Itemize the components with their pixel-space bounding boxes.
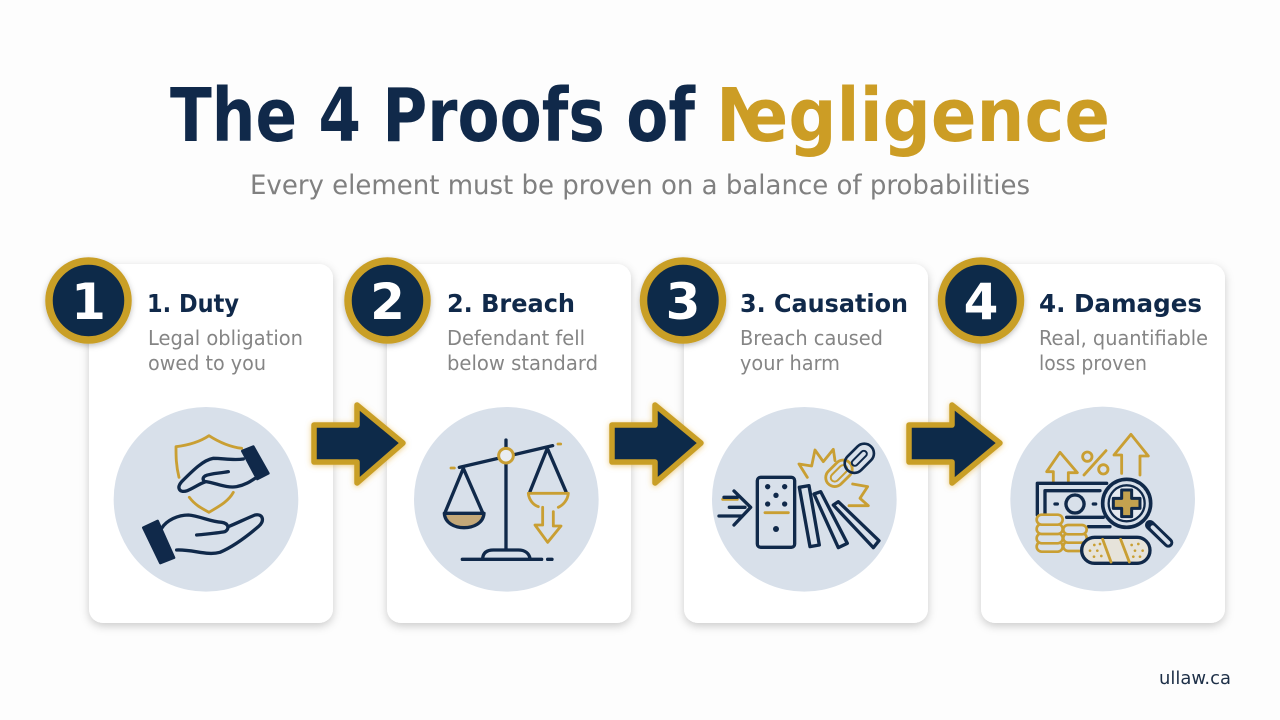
badge: 4: 4	[964, 273, 998, 331]
text: duty description: owed to you	[148, 351, 266, 375]
text: breach description: below standard	[447, 351, 598, 375]
title: The 4 Proofs of	[170, 73, 696, 159]
heading: duty: 1. Duty	[147, 289, 239, 318]
text: damages description	[1039, 326, 1208, 375]
icon: money and bandage	[1010, 407, 1195, 591]
badge: 1	[49, 261, 128, 340]
text: duty description: Legal obligation	[148, 326, 303, 350]
icon: dominoes and chain	[712, 407, 897, 592]
panel: duty	[89, 264, 333, 623]
badge: 2: 2	[370, 273, 405, 331]
badge: 3	[644, 261, 722, 340]
badge: 3: 3	[666, 273, 700, 331]
arrow: breach to causation	[612, 405, 701, 483]
text: duty description	[148, 326, 303, 375]
icon: scales	[414, 407, 599, 592]
text: damages description: loss proven	[1039, 351, 1147, 375]
heading: causation: 3. Causation	[740, 289, 908, 318]
panel: causation	[684, 264, 928, 623]
badge: 1: 1	[71, 273, 106, 331]
icon: hands and shield	[114, 407, 298, 592]
text: causation description: Breach caused	[740, 326, 883, 350]
text: breach description	[447, 326, 598, 375]
heading: damages: 4. Damages	[1039, 289, 1202, 318]
arrow: duty to breach	[314, 405, 403, 483]
text: breach description: Defendant fell	[447, 326, 585, 350]
heading: breach: 2. Breach	[447, 289, 575, 318]
arrow: causation to damages	[909, 405, 1000, 483]
subtitle: Every element must be proven on a balance of probabilities	[250, 170, 1030, 201]
text: causation description	[740, 326, 883, 375]
title	[170, 72, 1110, 159]
footer: website: ullaw.ca	[1159, 668, 1231, 689]
text: damages description: Real, quantifiable	[1039, 326, 1208, 350]
badge: 4	[942, 261, 1020, 340]
title: egligence	[743, 72, 1110, 159]
panel: damages	[981, 264, 1225, 623]
title: N	[716, 72, 772, 159]
badge: 2	[348, 261, 427, 340]
panel: breach	[387, 264, 631, 623]
text: causation description: your harm	[740, 351, 840, 375]
